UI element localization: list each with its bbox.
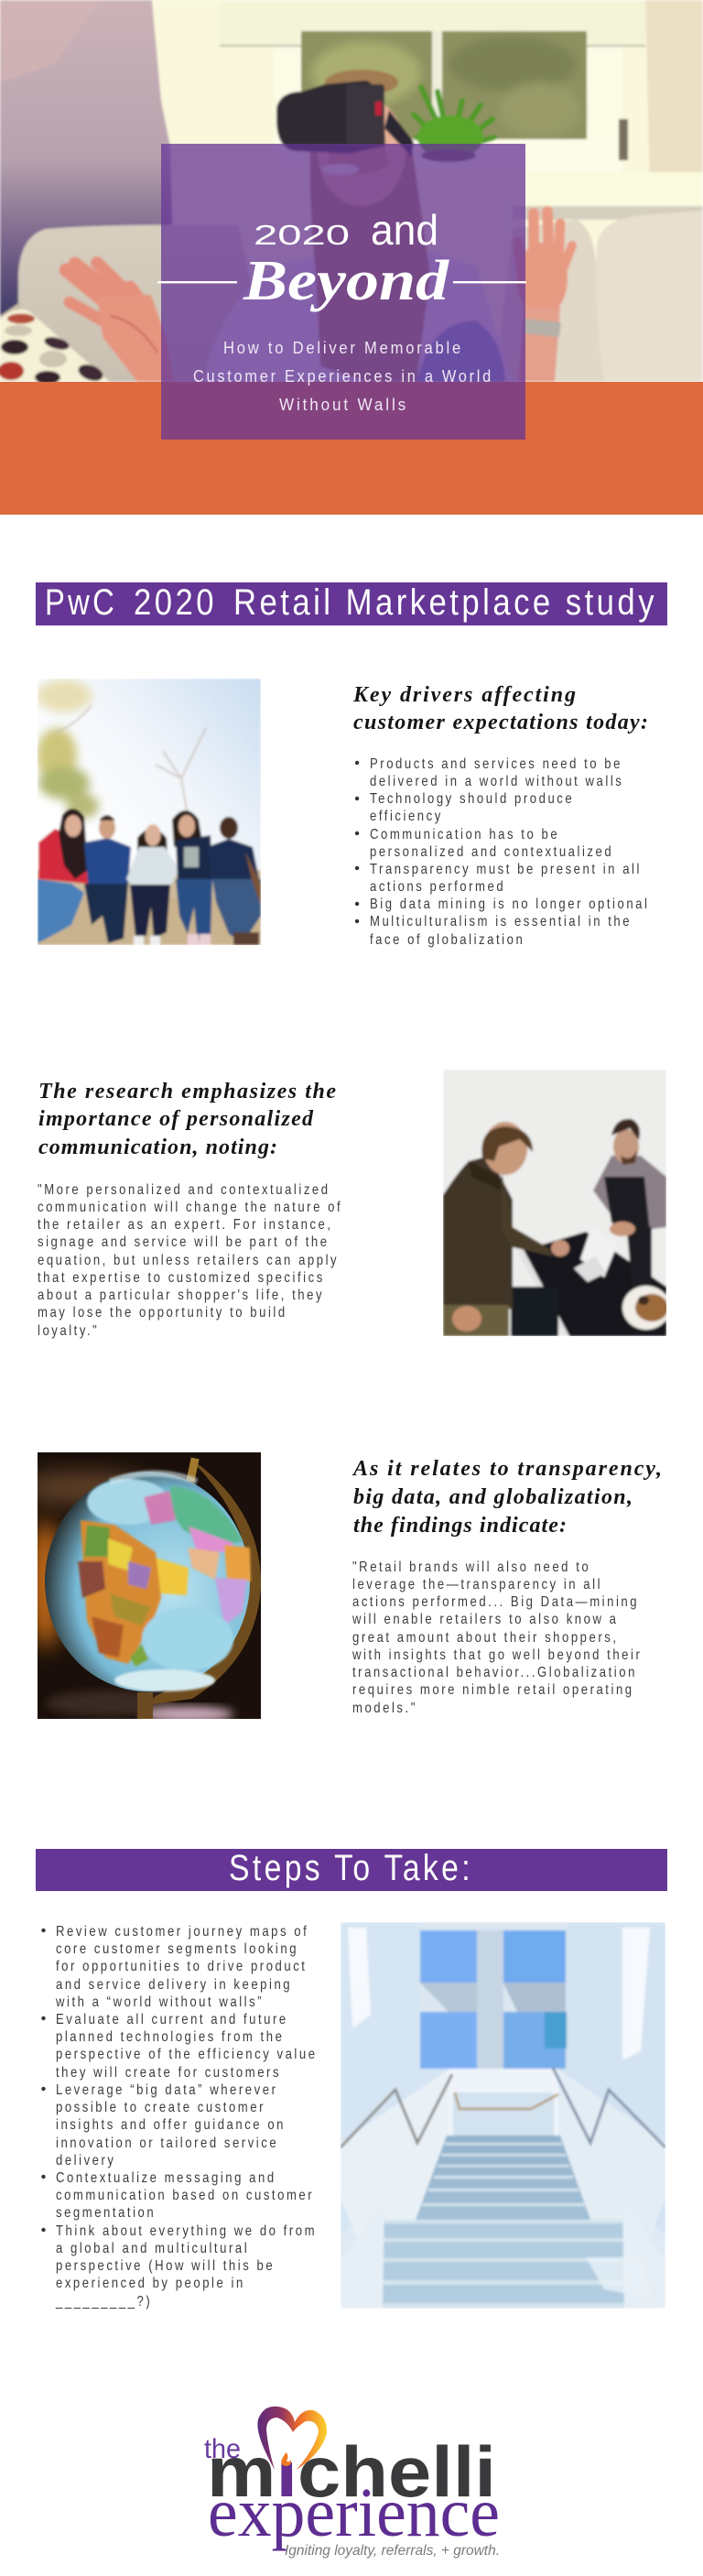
quote: transparency findings: will enable retailers to also know a (352, 1612, 619, 1627)
bullet list: steps to take (41, 1924, 318, 2310)
bullet list: steps to take: innovation or tailored service (56, 2136, 278, 2151)
heading: transparency findings (352, 1457, 662, 1538)
bullet list: key drivers: actions performed (370, 879, 505, 895)
bullet list: key drivers: Multiculturalism is essential in the (370, 914, 632, 929)
heading: research emphasizes (38, 1080, 336, 1159)
bullet list: steps to take: Evaluate all current and future (56, 2012, 288, 2027)
quote: personalized communication: "More personalized and contextualized (38, 1182, 330, 1198)
bullet list: steps to take: perspective of the efficiency value (56, 2047, 318, 2062)
title: 2020 and: and (371, 206, 438, 254)
title: 2020 and: 2020 (254, 219, 350, 251)
quote: transparency findings (352, 1560, 642, 1716)
title: Beyond with flanking rules: Beyond (243, 250, 449, 312)
bullet list: steps to take: insights and offer guidance on (56, 2117, 286, 2133)
bullet list: key drivers: Transparency must be present in all (370, 862, 642, 877)
bullet list: steps to take: a global and multicultural (56, 2241, 249, 2256)
bullet list: key drivers (355, 756, 649, 948)
bullet list: steps to take: segmentation (56, 2205, 156, 2221)
logo: the michelli experience: experience (208, 2474, 500, 2551)
quote: personalized communication: the retailer as an expert. For instance, (38, 1217, 333, 1233)
heading: key drivers (352, 683, 648, 734)
quote: personalized communication: may lose the opportunity to build (38, 1305, 287, 1321)
banner: PwC study (36, 582, 667, 625)
bullet list: steps to take: experienced by people in (56, 2276, 245, 2291)
quote: transparency findings: requires more nimble retail operating (352, 1682, 634, 1698)
bullet list: key drivers: Products and services need to be (370, 756, 622, 772)
logo: the michelli experience: Igniting loyalty, referrals, + growth. (285, 2543, 500, 2559)
quote: transparency findings: leverage the—transparency in all (352, 1577, 602, 1592)
quote: personalized communication: signage and service will be part of the (38, 1234, 330, 1250)
bullet list: steps to take: possible to create customer (56, 2100, 265, 2115)
banner: Steps To Take (36, 1848, 667, 1891)
bullet list: steps to take: Leverage “big data” wherever (56, 2082, 277, 2098)
quote: personalized communication: about a particular shopper's life, they (38, 1288, 324, 1303)
quote: personalized communication: communication will change the nature of (38, 1200, 342, 1215)
title panel: translucent purple box (161, 144, 525, 440)
logo: the michelli experience (204, 2407, 500, 2559)
hero photo: woman in VR headset on a sofa (0, 0, 703, 384)
quote: personalized communication: equation, but unless retailers can apply (38, 1253, 339, 1268)
quote: transparency findings: with insights that go well beyond their (352, 1647, 642, 1663)
photo: customer paying at a tablet (443, 1070, 670, 1336)
bullet list: key drivers: personalized and contextualized (370, 844, 613, 860)
photo: world globe (18, 1452, 261, 1723)
bullet list: steps to take: Think about everything we do from (56, 2223, 317, 2239)
heading: transparency findings: the findings indicate: (353, 1514, 567, 1538)
bullet list: steps to take: delivery (56, 2153, 116, 2168)
banner: PwC study: 2020 (134, 582, 217, 623)
bullet list: steps to take: Review customer journey maps of (56, 1924, 308, 1940)
bullet list: steps to take: for opportunities to drive product (56, 1959, 308, 1974)
bullet list: steps to take: core customer segments looking (56, 1941, 298, 1957)
quote: transparency findings: transactional behavior...Globalization (352, 1665, 637, 1680)
quote: personalized communication (38, 1182, 342, 1339)
bullet list: key drivers: face of globalization (370, 932, 525, 948)
orange band (0, 382, 703, 515)
subtitle: Without Walls (279, 396, 408, 414)
bullet list: key drivers: Big data mining is no longer optional (370, 897, 649, 912)
logo: the michelli experience: michelli (207, 2431, 496, 2512)
icon: gradient heart (257, 2407, 327, 2470)
bullet list: steps to take: and service delivery in keeping (56, 1977, 292, 1993)
heading: transparency findings: As it relates to transparency, (352, 1457, 662, 1481)
heading: key drivers: customer expectations today: (353, 711, 648, 734)
bullet list: key drivers: Communication has to be (370, 827, 559, 842)
quote: personalized communication: loyalty." (38, 1323, 99, 1339)
photo: bright staircase and windows (341, 1922, 665, 2309)
quote: transparency findings: "Retail brands will also need to (352, 1560, 590, 1575)
logo: the michelli experience: the (204, 2434, 241, 2464)
bullet list: steps to take: _________?) (55, 2294, 152, 2310)
icon: candle flame (281, 2452, 291, 2466)
bullet list: key drivers: efficiency (370, 809, 443, 824)
bullet list: steps to take: Contextualize messaging and (56, 2170, 276, 2186)
bullet list: steps to take: perspective (How will this be (56, 2258, 275, 2274)
title: 2020 and (254, 206, 438, 254)
quote: personalized communication: that expertise to customized specifics (38, 1270, 325, 1286)
quote: transparency findings: models." (352, 1701, 417, 1716)
quote: transparency findings: actions performed... Big Data—mining (352, 1594, 639, 1610)
heading: research emphasizes: communication, noting: (38, 1136, 277, 1159)
subtitle: How to Deliver Memorable (223, 339, 463, 357)
bullet list: steps to take: with a “world without walls” (55, 1994, 264, 2010)
quote: transparency findings: great amount about their shoppers, (352, 1630, 619, 1646)
bullet list: steps to take: planned technologies from the (56, 2029, 284, 2045)
heading: research emphasizes: importance of personalized (38, 1107, 314, 1131)
heading: research emphasizes: The research emphasizes the (38, 1080, 336, 1103)
banner: Steps To Take: Steps To Take: (229, 1848, 473, 1888)
subtitle (193, 339, 493, 414)
heading: key drivers: Key drivers affecting (352, 683, 576, 707)
heading: transparency findings: big data, and globalization, (353, 1485, 633, 1509)
subtitle: Customer Experiences in a World (193, 367, 493, 386)
bullet list: key drivers: Technology should produce (370, 791, 574, 807)
bullet list: steps to take: they will create for customers (56, 2065, 281, 2081)
banner: PwC study: PwC (45, 582, 117, 623)
bullet list: steps to take: communication based on customer (56, 2188, 314, 2203)
bullet list: key drivers: delivered in a world without walls (370, 774, 623, 789)
photo: five friends sitting on a wall (37, 679, 261, 945)
